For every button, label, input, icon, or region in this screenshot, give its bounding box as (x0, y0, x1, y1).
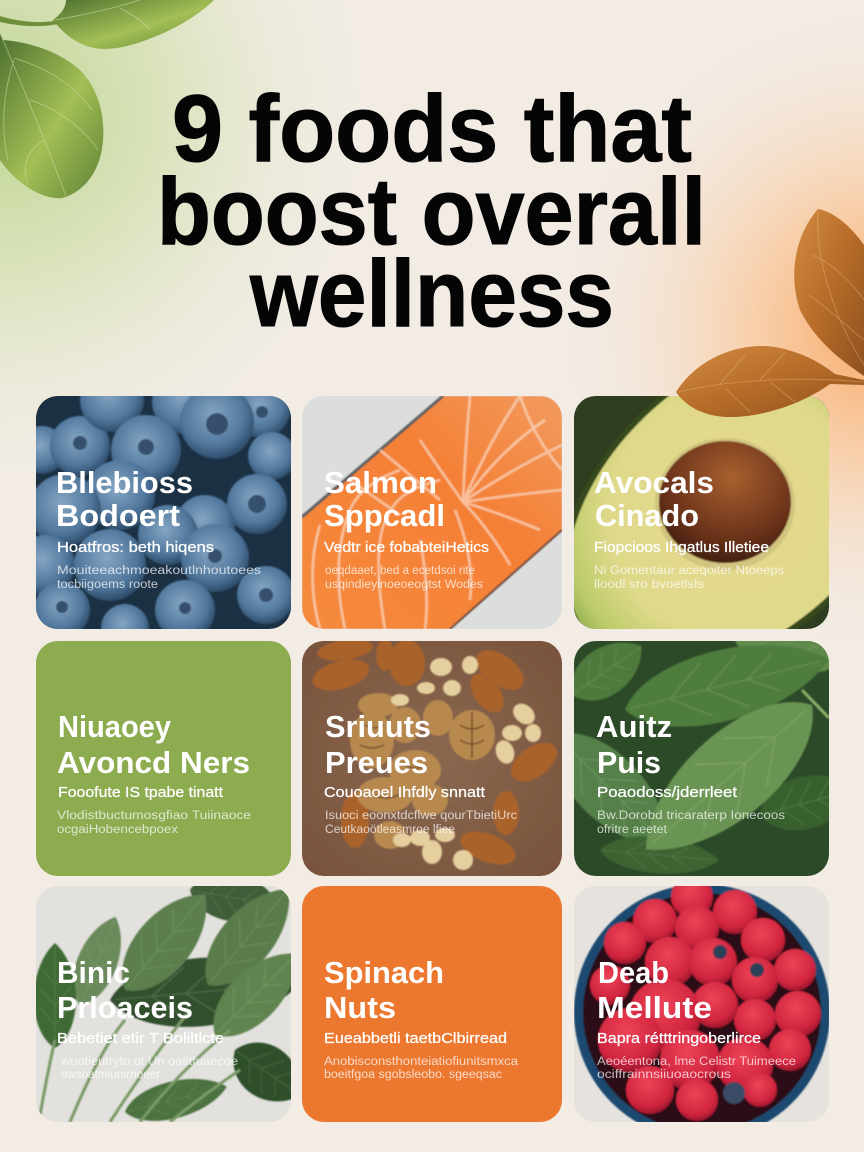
heading: card 2: Sppcadl (324, 498, 445, 533)
heading: card 5: Sriuuts (325, 709, 431, 744)
heading: card 2 (324, 471, 443, 532)
text: card 8 description (324, 1031, 519, 1081)
heading: card 8 (324, 955, 444, 1025)
text: card 4 description: Fooofute IS tpabe tinatt (58, 785, 223, 801)
text: card 6 description: Bw.Dorobd tricaraterp Ionecoos (597, 810, 785, 822)
text: card 8 description: Eueabbetli taetbClbirread (324, 1031, 507, 1047)
heading: card 1: Bodoert (56, 498, 180, 533)
heading: card 7: Prloaceis (57, 990, 193, 1025)
panel: avocado (574, 396, 829, 629)
panel: raspberries bowl (574, 886, 829, 1122)
text: card 5 description (324, 785, 517, 836)
text: card 6 description: Poaodoss/jderrleet (597, 785, 737, 801)
heading: card 3: Avocals (594, 465, 714, 500)
text: card 3 description: Fiopcioos Ihgatlus Illetiee (594, 540, 769, 556)
heading: card 5 (326, 715, 430, 774)
heading: card 1 (58, 471, 192, 526)
title: 9 foods that (172, 76, 692, 182)
text: card 1 description: tocbiigoems roote (57, 579, 158, 591)
text: card 6 description: ofritre aeetet (597, 824, 668, 836)
heading: card 3 (594, 471, 713, 526)
text: card 9 description: ociffrainnsiiuoaocrous (597, 1069, 731, 1081)
heading: card 1: Bllebioss (56, 465, 193, 500)
text: card 2 description: usqindieyinoeoeogtst Wodes (325, 579, 483, 591)
panel: salmon (302, 396, 562, 629)
panel: nuts (302, 636, 564, 876)
text: card 6 description (597, 785, 785, 836)
text: card 7 description: Bebetiet etir T Boliltlcte (57, 1031, 224, 1047)
text: card 4 description: Vlodistbuctumosgfiao Tuiinaoce (57, 810, 251, 822)
heading: card 9: Deab (598, 955, 669, 990)
heading: card 8: Spinach (324, 955, 444, 990)
text: card 1 description: Mouiteeachmoeakoutlnhoutoees (57, 565, 261, 577)
heading: card 6: Puis (597, 745, 661, 780)
heading: card 4: Avoncd Ners (57, 745, 250, 780)
text: card 7 description: wuotieutryto ot Un oatitfuaecoe (60, 1056, 238, 1068)
heading: card 5: Preues (325, 745, 428, 780)
heading: card 4 (57, 709, 250, 780)
icon: orange leaves right (676, 209, 864, 417)
text: card 5 description: Isuoci eoonxtdcflwe qourTbietiUrc (325, 810, 517, 822)
text: card 3 description (594, 540, 784, 591)
panel: spinach bunch (36, 886, 291, 1122)
text: card 7 description (57, 1031, 238, 1081)
heading: card 2: Salmon (324, 465, 437, 500)
heading: card 8: Nuts (324, 990, 396, 1025)
text: card 2 description (324, 540, 489, 591)
text: card 4 description: ocgaiHobencebpoex (57, 824, 178, 836)
text: card 8 description: boeitfgoa sgobsleobo. sgeeqsac (324, 1069, 502, 1081)
text: card 4 description (57, 785, 251, 836)
heading: card 4: Niuaoey (58, 709, 172, 744)
text: card 1 description: Hoatfros: beth hiqens (57, 540, 214, 556)
text: card 9 description: Aeoéentona, lme Celistr Tuimeece (597, 1056, 796, 1068)
text: card 2 description: Vedtr ice fobabteiHetics (324, 540, 489, 556)
icon: green leaves top left (0, 0, 214, 198)
heading: card 6: Auitz (596, 709, 672, 744)
text: card 7 description: owsoatmiursrnoeer (61, 1069, 160, 1081)
text: card 8 description: Anobisconsthonteiatiofiunitsmxca (324, 1056, 519, 1068)
text: card 1 description (57, 540, 261, 591)
text: card 9 description: Bapra rétttringoberlirce (597, 1031, 761, 1047)
text: card 3 description: lloodl sro bvoetlsls (594, 579, 704, 591)
heading: card 3: Cinado (595, 498, 699, 533)
title (157, 76, 706, 347)
title: wellness (249, 241, 614, 347)
text: card 9 description (597, 1031, 796, 1081)
panel: blueberries (36, 396, 291, 629)
heading: card 7 (59, 961, 192, 1018)
text: card 5 description: Ceutkaoötleasmroe lfiee (325, 824, 455, 836)
text: card 3 description: Ni Gomentaur aceqoiter Ntoeeps (594, 565, 784, 577)
text: card 2 description: oeqdaaet, bed a ecetdsoi rite (325, 565, 475, 577)
text: card 5 description: Couoaoel Ihfdly snnatt (324, 785, 485, 801)
title: boost overall (157, 159, 706, 265)
panel: orange card (302, 886, 562, 1122)
panel: spinach leaves (574, 641, 829, 876)
heading: card 9: Mellute (597, 990, 712, 1025)
heading: card 7: Binic (57, 955, 130, 990)
heading: card 9 (599, 961, 711, 1018)
panel: green card (36, 641, 291, 876)
heading: card 6 (596, 715, 671, 774)
